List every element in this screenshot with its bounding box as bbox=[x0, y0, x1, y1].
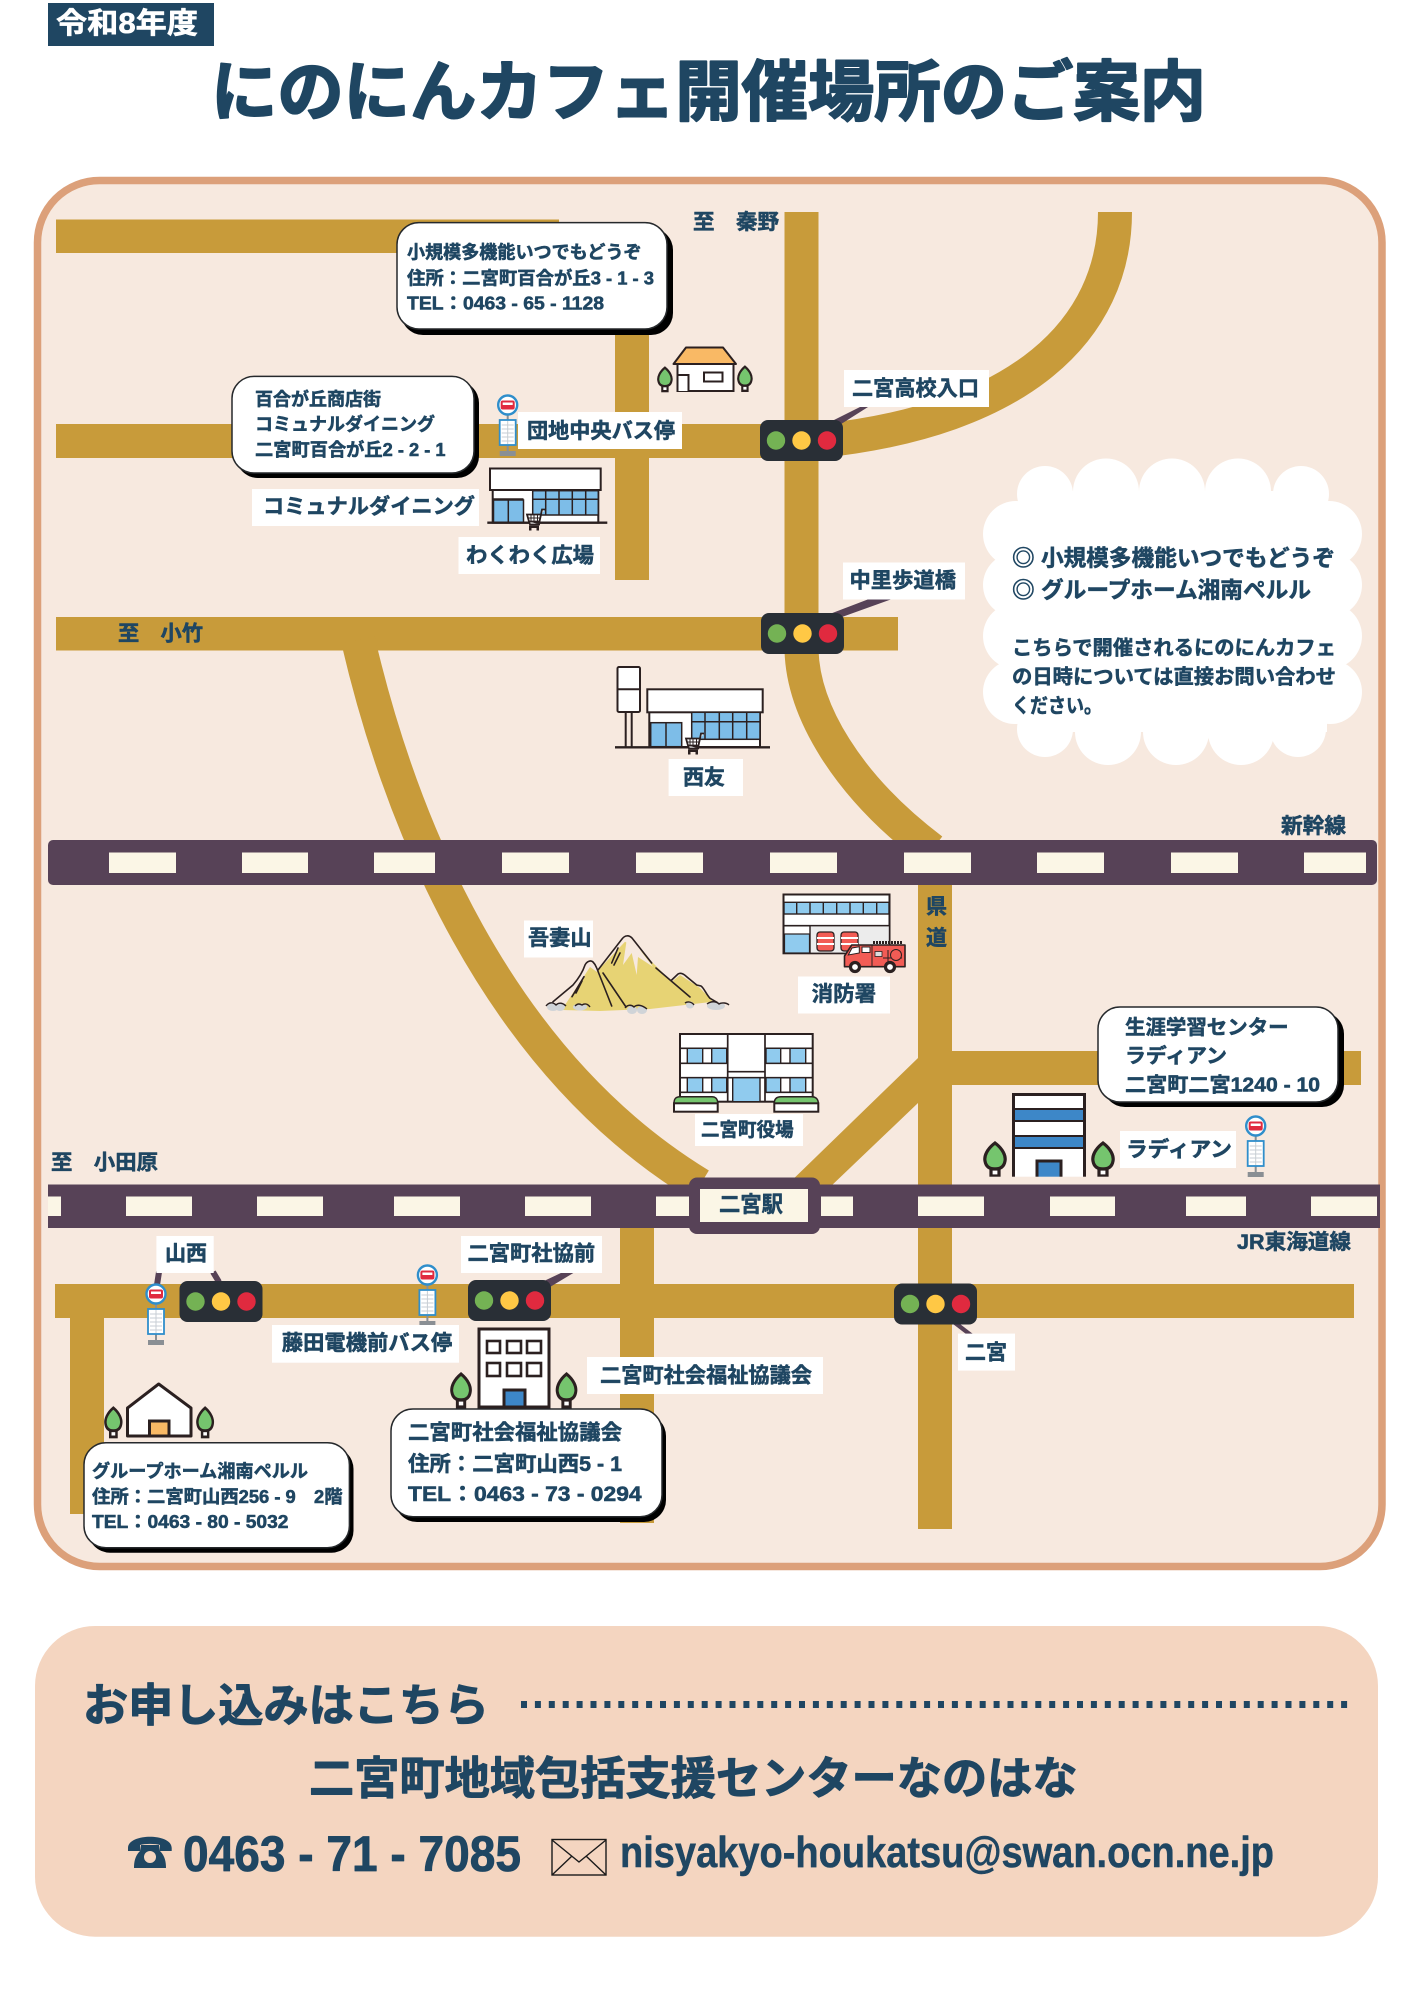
traffic light: 二宮町社協前 bbox=[468, 1280, 551, 1321]
direction label: 至 秦野: 至 秦野 bbox=[693, 211, 779, 234]
label: 藤田電機前バス停 bbox=[272, 1325, 459, 1363]
card: 生涯学習センター ラディアン bbox=[1098, 1007, 1344, 1107]
cloud callout: こちらで開催されるにのにんカフェ bbox=[1012, 636, 1336, 660]
rail: JR東海道線 bbox=[48, 1184, 1380, 1228]
store icon: コミュナルダイニング bbox=[487, 468, 607, 530]
bus stop icon: 山西 bbox=[146, 1284, 166, 1345]
icon: telephone bbox=[128, 1837, 172, 1868]
badge: 令和8年度 bbox=[48, 3, 214, 46]
card: 二宮町社会福祉協議会: 二宮町社会福祉協議会 bbox=[408, 1422, 622, 1444]
label: 二宮町役場: 二宮町役場 bbox=[701, 1119, 794, 1141]
cloud callout bbox=[983, 458, 1362, 765]
card: 二宮町社会福祉協議会: TEL：0463 - 73 - 0294 bbox=[408, 1483, 642, 1506]
line label: 新幹線: 新幹線 bbox=[1281, 815, 1346, 838]
town hall icon bbox=[674, 1034, 818, 1112]
house icon: グループホーム湘南ペルル bbox=[105, 1384, 213, 1437]
label: 二宮町社会福祉協議会: 二宮町社会福祉協議会 bbox=[600, 1364, 812, 1388]
label: 二宮 bbox=[958, 1334, 1015, 1371]
label: 西友: 西友 bbox=[683, 766, 725, 790]
phone number: 0463 - 71 - 7085 bbox=[183, 1826, 521, 1882]
traffic light: 中里歩道橋 bbox=[761, 613, 844, 654]
bus stop icon: ラディアン bbox=[1246, 1116, 1265, 1177]
icon: envelope bbox=[552, 1840, 606, 1875]
card: 百合が丘商店街 コミュナルダイニング bbox=[232, 376, 479, 478]
cloud shape bbox=[983, 458, 1362, 765]
traffic light: 山西 bbox=[180, 1281, 262, 1322]
label: わくわく広場 bbox=[458, 537, 600, 574]
label: 二宮町社会福祉協議会 bbox=[587, 1357, 823, 1394]
cloud callout: ください。 bbox=[1012, 694, 1102, 718]
traffic light: 二宮高校入口 bbox=[760, 420, 843, 461]
building icon: 二宮町社会福祉協議会 bbox=[452, 1329, 576, 1407]
label: ラディアン bbox=[1120, 1131, 1236, 1168]
title: にのにんカフェ開催場所のご案内 bbox=[211, 55, 1206, 129]
road label: 県道: 道 bbox=[926, 927, 947, 950]
label: 山西: 山西 bbox=[165, 1242, 207, 1266]
label: 消防署 bbox=[798, 976, 890, 1014]
label: 吾妻山: 吾妻山 bbox=[528, 927, 592, 950]
label: ラディアン: ラディアン bbox=[1126, 1138, 1232, 1162]
card: グループホーム湘南ペルル bbox=[84, 1443, 354, 1553]
label: コミュナルダイニング bbox=[252, 489, 479, 526]
email address: nisyakyo-houkatsu@swan.ocn.ne.jp bbox=[620, 1828, 1274, 1877]
building icon: ラディアン bbox=[975, 1094, 1125, 1184]
label: 二宮高校入口: 二宮高校入口 bbox=[852, 378, 979, 400]
label: コミュナルダイニング: コミュナルダイニング bbox=[263, 494, 475, 518]
bus stop icon: 団地中央 bbox=[498, 396, 517, 456]
connectors: 山西 bbox=[157, 1272, 219, 1285]
line label: JR東海道線: JR東海道線 bbox=[1237, 1231, 1351, 1254]
label: 山西 bbox=[156, 1236, 214, 1273]
panel: map bbox=[38, 180, 1382, 1566]
panel: contact footer bbox=[35, 1626, 1378, 1937]
label: 団地中央バス停 bbox=[518, 412, 682, 449]
house icon: 小規模多機能 bbox=[658, 348, 752, 391]
fire station icon bbox=[784, 894, 905, 972]
road label: 県道 bbox=[926, 896, 947, 950]
traffic light: 二宮 bbox=[894, 1284, 977, 1324]
card: 二宮町社会福祉協議会: 住所：二宮町山西5 - 1 bbox=[408, 1453, 622, 1476]
fire truck bbox=[844, 942, 905, 972]
card: 生涯学習センター ラディアン: 生涯学習センター bbox=[1125, 1016, 1289, 1039]
cloud callout: ◎ 小規模多機能いつでもどうぞ bbox=[1012, 546, 1335, 571]
station: 二宮駅: 二宮駅 bbox=[719, 1192, 783, 1217]
connector: 二宮 bbox=[953, 1324, 973, 1334]
card: グループホーム湘南ペルル: TEL：0463 - 80 - 5032 bbox=[92, 1512, 288, 1532]
direction label: 至 小田原: 至 小田原 bbox=[51, 1152, 158, 1174]
card: 二宮町社会福祉協議会 bbox=[391, 1409, 666, 1522]
direction label: 至 小竹: 至 小竹 bbox=[118, 622, 203, 646]
card: 百合が丘商店街 コミュナルダイニング: コミュナルダイニング bbox=[255, 414, 435, 434]
label: 消防署: 消防署 bbox=[812, 983, 876, 1006]
card: 小規模多機能いつでもどうぞ: TEL：0463 - 65 - 1128 bbox=[407, 294, 604, 314]
card: グループホーム湘南ペルル: グループホーム湘南ペルル bbox=[92, 1460, 308, 1482]
road label: 県道: 県 bbox=[926, 896, 947, 918]
station: 二宮駅 bbox=[689, 1178, 820, 1234]
card: 生涯学習センター ラディアン: ラディアン bbox=[1125, 1044, 1227, 1068]
label: 藤田電機前バス停: 藤田電機前バス停 bbox=[282, 1332, 452, 1355]
badge: 令和8年度: 令和8年度 bbox=[56, 7, 198, 40]
rail: 新幹線 bbox=[48, 840, 1377, 885]
mountain: 吾妻山 bbox=[546, 936, 729, 1014]
connector: 中里歩道橋 bbox=[831, 599, 892, 617]
bus stop icon: 藤田電機前 bbox=[418, 1266, 437, 1326]
connector: 二宮町社協前 bbox=[544, 1272, 575, 1287]
card: 百合が丘商店街 コミュナルダイニング: 二宮町百合が丘2 - 2 - 1 bbox=[255, 439, 446, 460]
card: 小規模多機能いつでもどうぞ: 住所：二宮町百合が丘3 - 1 - 3 bbox=[407, 268, 654, 288]
label: わくわく広場: わくわく広場 bbox=[466, 544, 594, 568]
label: 二宮町社協前: 二宮町社協前 bbox=[468, 1242, 595, 1266]
cloud callout: の日時については直接お問い合わせ bbox=[1012, 666, 1336, 688]
label: 二宮: 二宮 bbox=[965, 1342, 1007, 1364]
label: 二宮町社協前 bbox=[461, 1236, 602, 1273]
connector: 二宮高校入口 bbox=[834, 407, 868, 426]
organisation name: 二宮町地域包括支援センターなのはな bbox=[309, 1753, 1078, 1804]
dotted leader bbox=[521, 1701, 1354, 1708]
roads bbox=[55, 212, 1361, 1529]
card: グループホーム湘南ペルル: 住所：二宮町山西256 - 9 2階 bbox=[92, 1487, 343, 1507]
label: 二宮町役場 bbox=[695, 1114, 803, 1146]
card: 生涯学習センター ラディアン: 二宮町二宮1240 - 10 bbox=[1125, 1074, 1320, 1096]
label: 西友 bbox=[669, 759, 743, 796]
label: 二宮高校入口 bbox=[844, 370, 989, 407]
heading: お申し込みはこちら: お申し込みはこちら bbox=[83, 1680, 489, 1731]
label: 中里歩道橋: 中里歩道橋 bbox=[850, 570, 956, 592]
card: 百合が丘商店街 コミュナルダイニング: 百合が丘商店街 bbox=[255, 388, 381, 410]
card: 小規模多機能いつでもどうぞ: 小規模多機能いつでもどうぞ bbox=[407, 242, 642, 262]
store icon: 西友 bbox=[615, 667, 770, 754]
card: 小規模多機能いつでもどうぞ bbox=[397, 223, 673, 335]
label: 団地中央バス停: 団地中央バス停 bbox=[527, 420, 675, 443]
label: 吾妻山 bbox=[524, 920, 593, 958]
cloud callout: ◎ グループホーム湘南ペルル bbox=[1012, 577, 1311, 603]
label: 中里歩道橋 bbox=[843, 562, 965, 600]
